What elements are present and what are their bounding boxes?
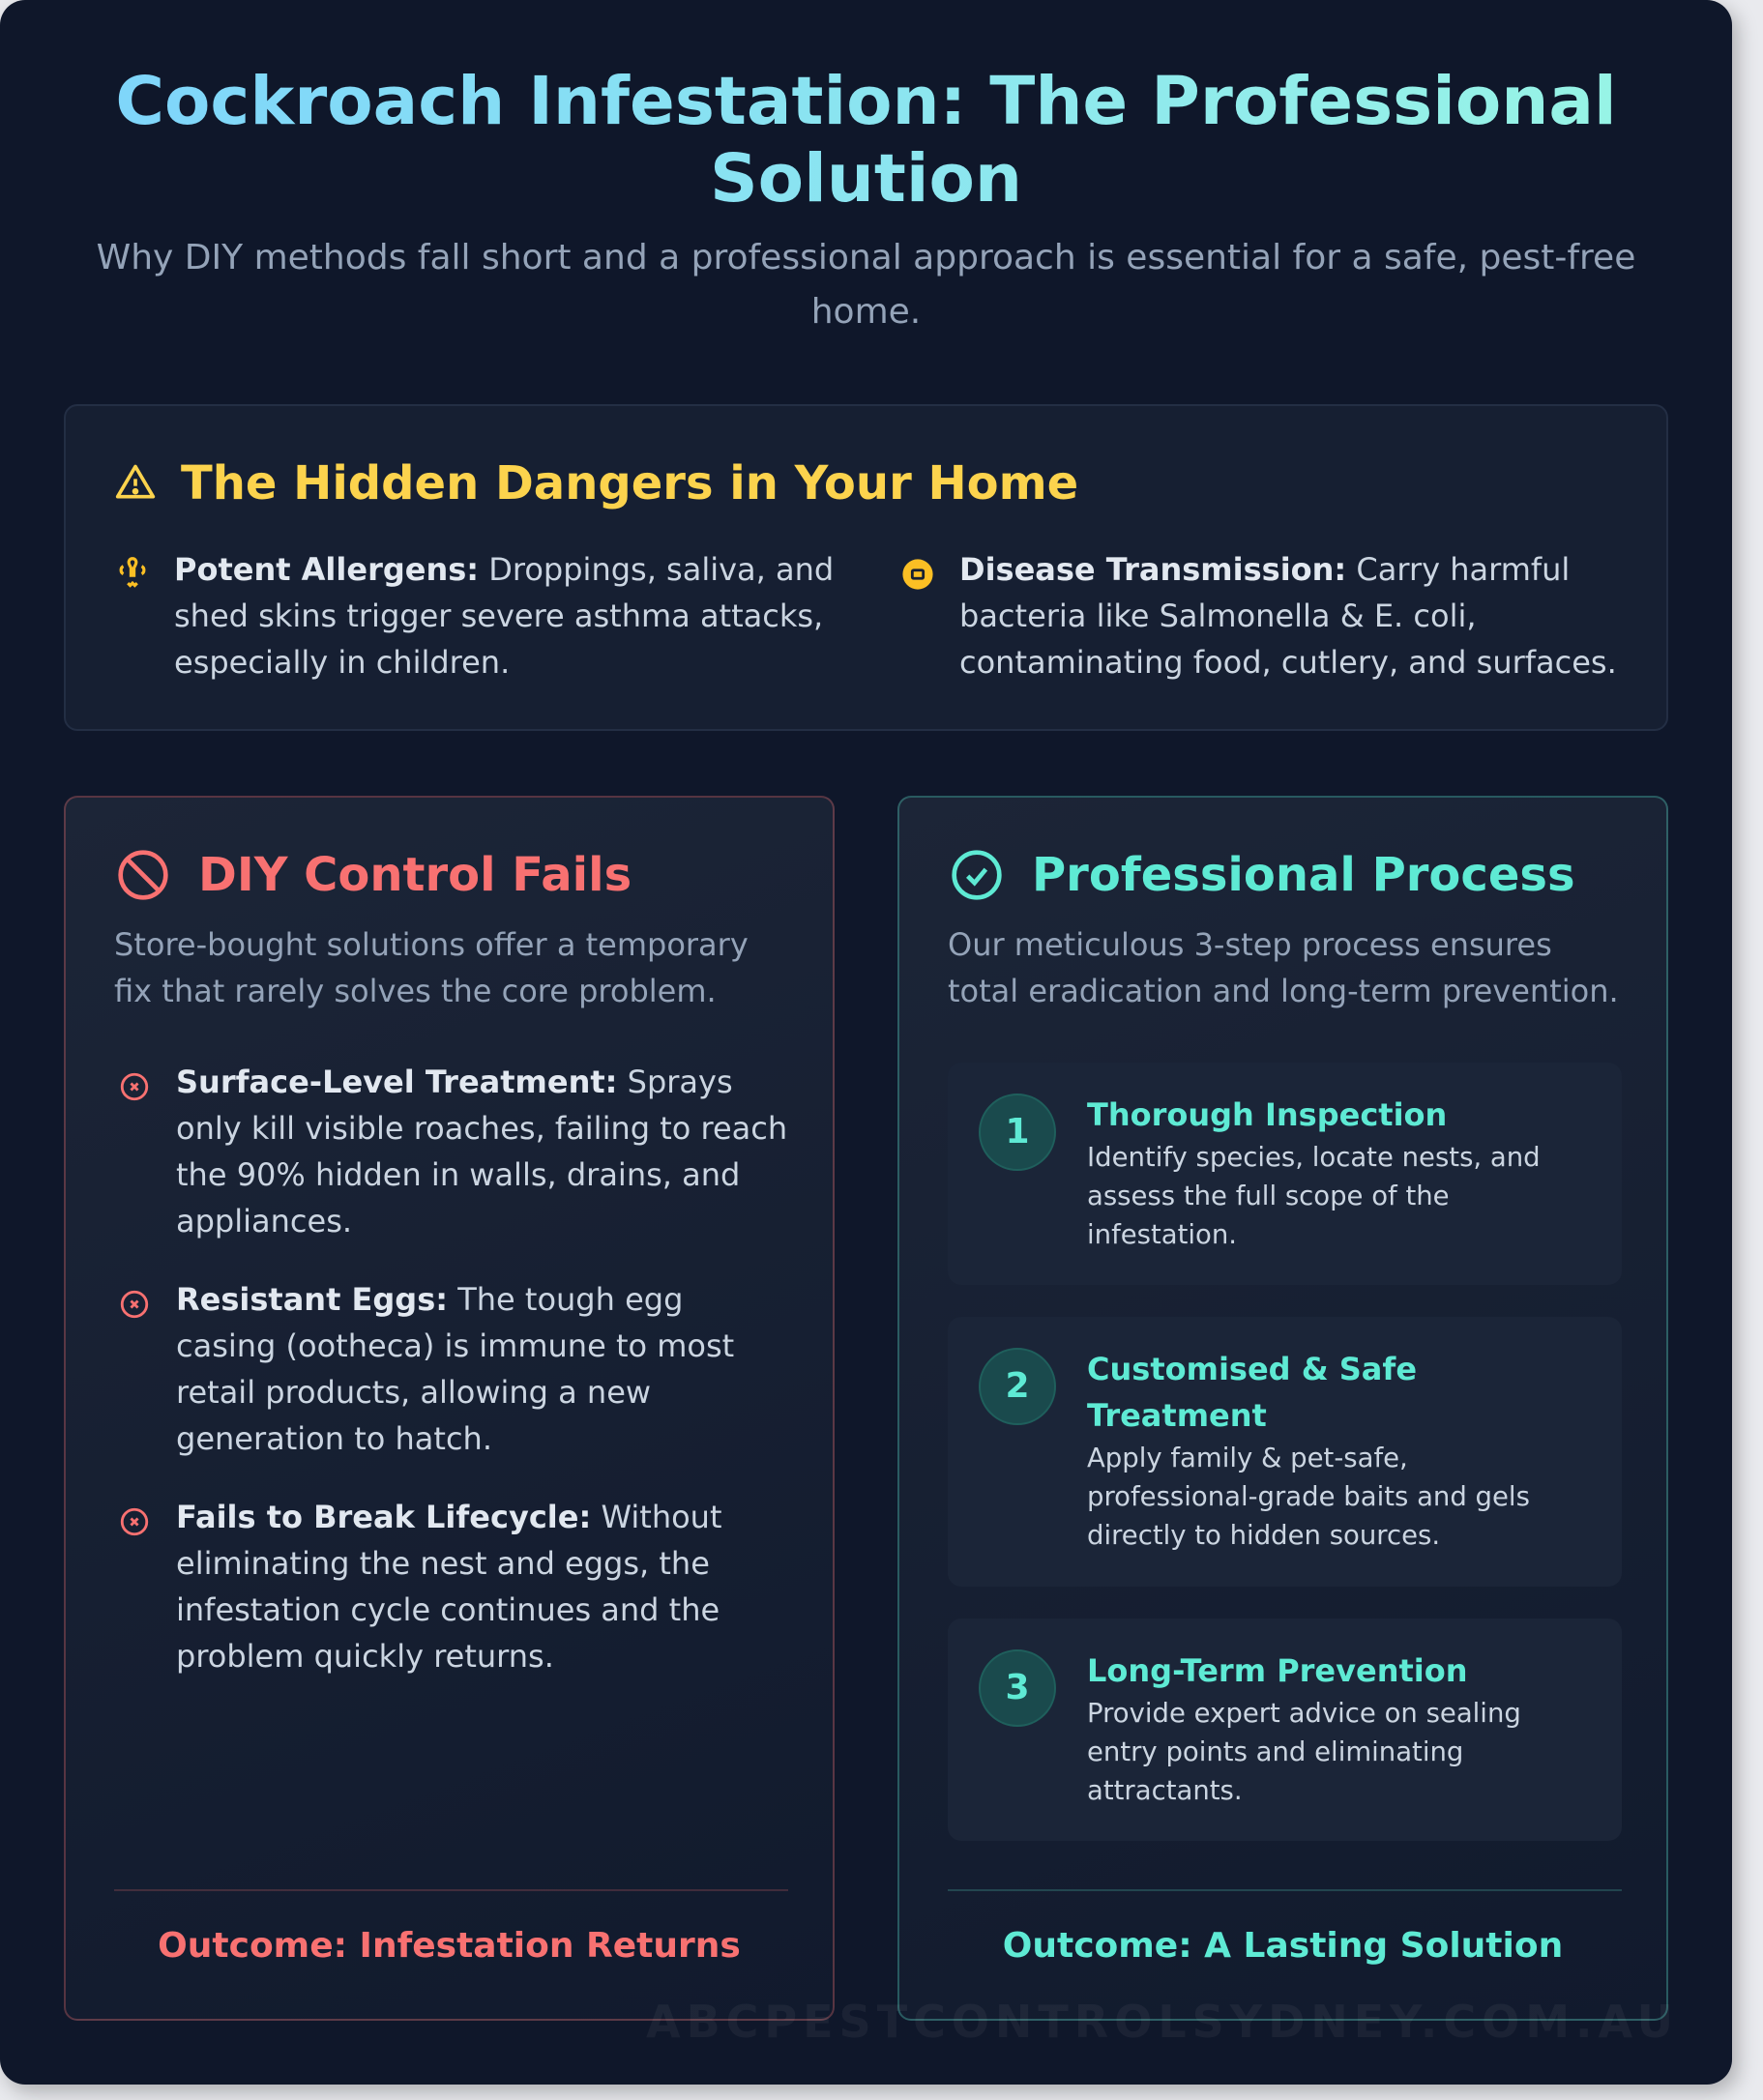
step 2: 2 [1005, 1366, 1030, 1406]
heading: professional: Professional Process [1032, 848, 1575, 902]
watermark: ABCPESTCONTROLSYDNEY.COM.AU [646, 1996, 1679, 2048]
step 3 [948, 1619, 1622, 1841]
step 2: Customised & Safe Treatment [1087, 1351, 1417, 1434]
icon: check circle [952, 850, 1002, 900]
heading: dangers: The Hidden Dangers in Your Home [181, 456, 1078, 510]
step 3: 3 [1005, 1668, 1030, 1707]
title: Solution [710, 140, 1022, 218]
outcome: DIY: Outcome: Infestation Returns [158, 1926, 741, 1966]
step 1: Identify species, locate nests, and assess the full scope of the infestation. [1087, 1142, 1541, 1250]
step 2: Apply family & pet-safe, professional-grade baits and gels directly to hidden sources. [1087, 1443, 1530, 1551]
item: eggs: Resistant Eggs: The tough egg casing (ootheca) is immune to most retail products, allowing a new generation to hatch. [176, 1281, 734, 1457]
subtitle: Why DIY methods fall short and a professional approach is essential for a safe, pest-free home. [97, 238, 1635, 332]
description: Our meticulous 3-step process ensures total eradication and long-term prevention. [948, 926, 1619, 1009]
panel: professional process [897, 796, 1668, 2021]
step 1 [948, 1063, 1622, 1285]
step 3: Long-Term Prevention [1087, 1652, 1468, 1689]
panel: DIY control fails [64, 796, 835, 2021]
step 1: Thorough Inspection [1087, 1096, 1447, 1133]
step 2 [948, 1317, 1622, 1587]
item: surface-level: Surface-Level Treatment: Sprays only kill visible roaches, failing to reach the 90% hidden in walls, drains, and appliances. [176, 1064, 787, 1240]
icon: prohibited [118, 850, 168, 900]
title [0, 63, 1732, 218]
text: allergens: Potent Allergens: Droppings, saliva, and shed skins trigger severe asthma attacks, especially in children. [174, 551, 834, 681]
step 3: Provide expert advice on sealing entry points and eliminating attractants. [1087, 1698, 1521, 1806]
step 1: 1 [1005, 1112, 1030, 1152]
heading: DIY: DIY Control Fails [198, 848, 632, 902]
outcome: professional: Outcome: A Lasting Solution [1003, 1926, 1563, 1966]
list: failures [120, 1064, 787, 1675]
item: lifecycle: Fails to Break Lifecycle: Without eliminating the nest and eggs, the infestation cycle continues and the problem quickly returns. [176, 1499, 721, 1675]
description: Store-bought solutions offer a temporary fix that rarely solves the core problem. [114, 926, 749, 1009]
panel: hidden dangers [64, 404, 1668, 731]
icon: warning [116, 464, 155, 499]
icon: disease [902, 559, 933, 590]
text: disease: Disease Transmission: Carry harmful bacteria like Salmonella & E. coli, contaminating food, cutlery, and surfaces. [959, 551, 1617, 681]
title: Cockroach Infestation: The Professional [115, 63, 1617, 140]
icon: allergen [120, 557, 145, 588]
